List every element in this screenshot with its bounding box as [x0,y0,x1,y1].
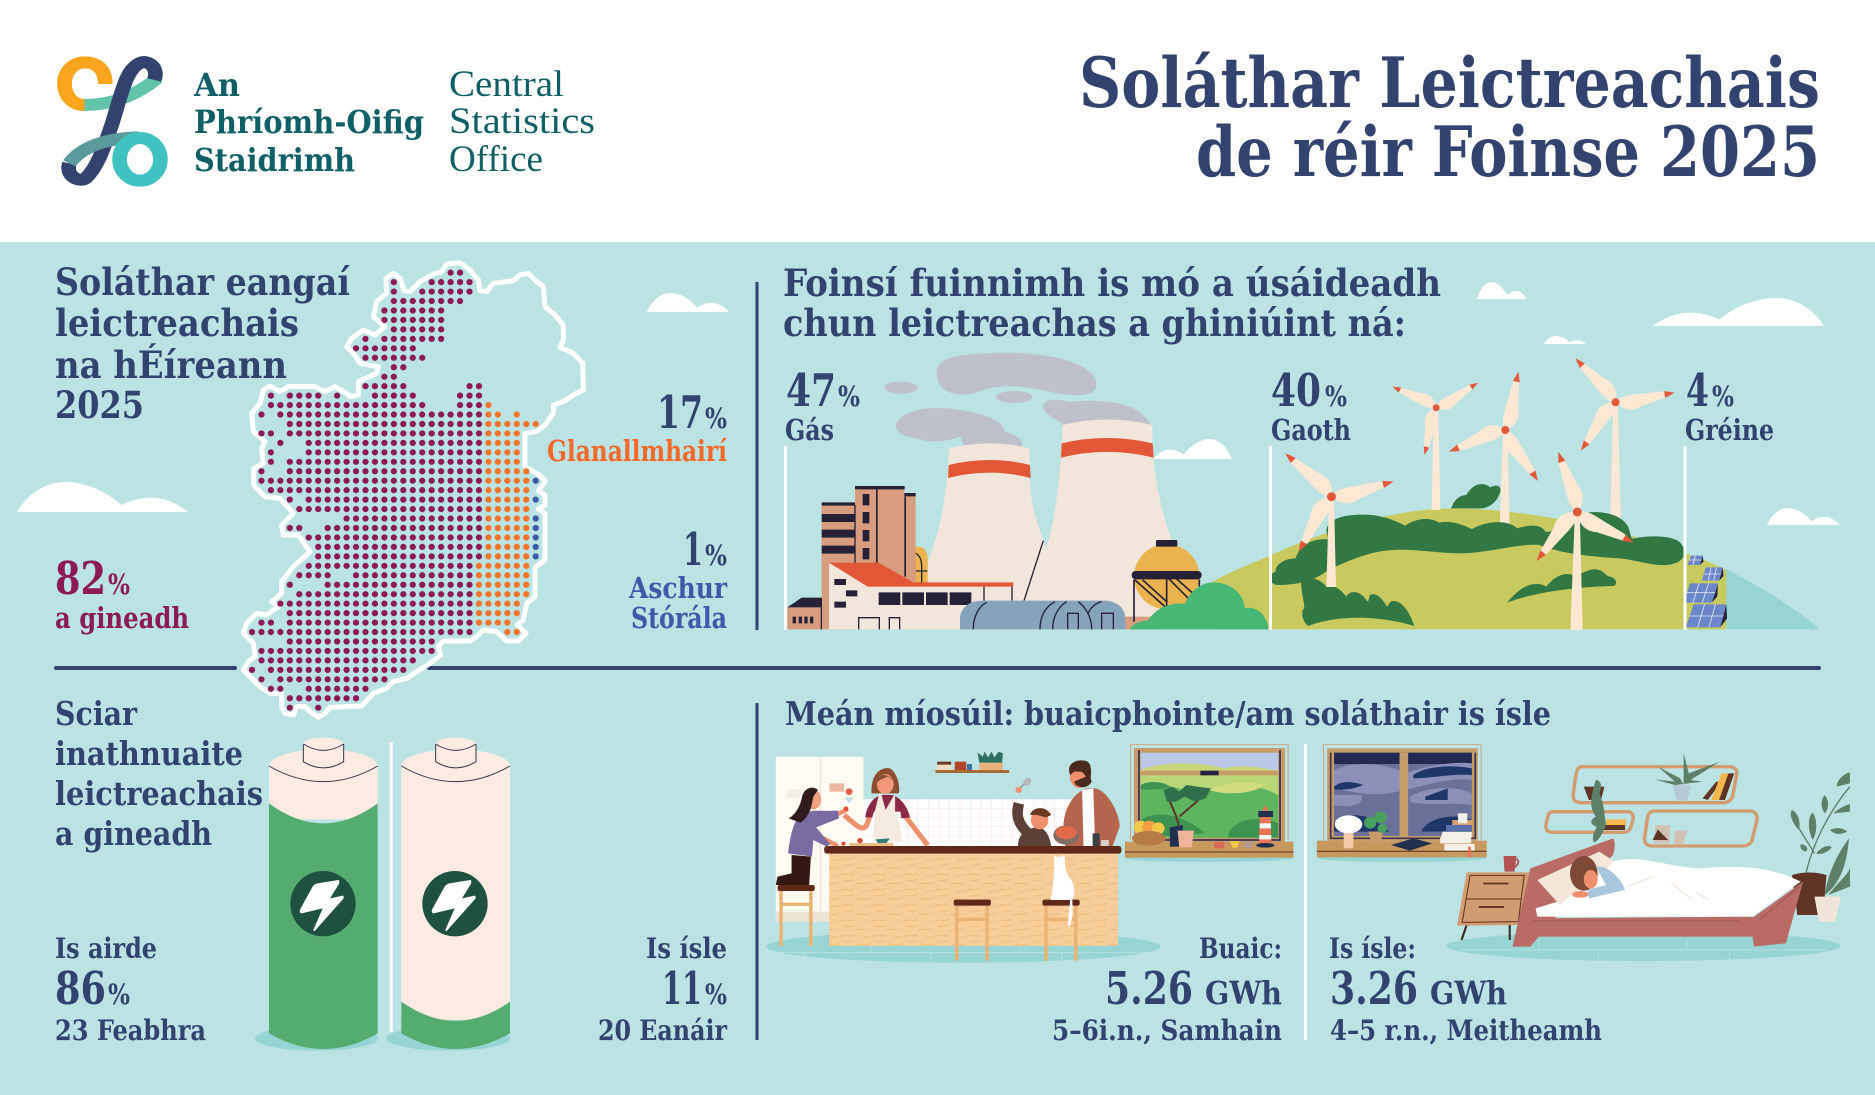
heading: renewable share [55,694,263,853]
night window [1323,744,1481,841]
sleeping person [1570,856,1625,898]
blue storage tank [960,601,1125,629]
section divider lines [54,282,1821,1040]
stat: 17% imports: Glanallmhairí [547,434,727,468]
wind turbines in front of hill [1282,446,1636,630]
stat: 1% storage: Stórála [631,601,727,635]
logo text: Irish name [193,66,424,179]
battery divider [390,742,393,1032]
gas holder [1123,540,1202,629]
stat: lowest 11%: % [705,978,727,1011]
stat: 1% storage: 1 [683,523,703,576]
stat: 17% imports [547,386,727,468]
title: Soláthar Leictreachais [1079,43,1820,124]
stat: 47% gas [785,364,860,447]
stat: peak 5.26 GWh: 5.26 [1105,962,1193,1015]
illustration: power station [787,353,1268,629]
heading: renewable share: leictreachais [55,774,263,813]
stat: lowest 11%: 11 [662,962,702,1015]
bar stools [778,885,1080,961]
battery: highest 86% [255,738,378,1051]
main panel background [0,242,1875,1095]
bed [1512,838,1803,947]
title [1079,43,1820,193]
stat: highest 86%: % [108,978,130,1011]
stat: 4% solar: % [1712,380,1734,413]
logo text: Irish name: Staidrimh [194,141,355,179]
clouds [17,282,1840,525]
stat: highest 86%: Is airde [55,932,157,965]
counter [824,838,1121,946]
stat: 40% wind: 40 [1271,364,1321,417]
logo text: English name [449,64,595,180]
source dividers [784,446,1686,630]
cooling towers [923,419,1178,629]
map of Ireland: dot matrix [243,263,583,717]
wind turbines behind hill [1391,352,1676,525]
stat: lowest 11%: Is ísle [646,932,727,965]
stat: peak 5.26 GWh: Buaic: [1199,932,1282,965]
stat: highest 86%: 23 Feabhra [55,1014,206,1047]
stat: 4% solar [1685,364,1774,447]
factory block [787,486,1013,629]
heading: energy sources: Foinsí fuinnimh is mó a úsáideadh [783,261,1441,305]
illustration: wind hill [1213,508,1820,629]
stat: 82% generated [55,552,189,635]
heading: renewable share: a gineadh [55,814,212,853]
stat: lowest 11% [598,932,728,1047]
man with bowl [1053,760,1120,846]
batteries [255,738,510,1051]
stat: 82% generated: % [108,568,130,601]
stat: highest 86%: 86 [55,962,106,1015]
stat: 40% wind: % [1325,380,1347,413]
logo text: English name: Statistics [449,101,595,142]
logo: CSO mark [64,62,160,181]
floor [1446,931,1840,961]
heading: monthly average peak/lowest: Meán míosúil: buaicphointe/am soláthair is ísle [785,694,1551,733]
fridge [776,757,864,922]
stat: 40% wind: Gaoth [1271,413,1351,447]
illustration: solar panels [1684,556,1727,627]
divider: peak/lowest [1304,744,1307,1040]
heading: energy sources [783,261,1441,345]
girl [776,788,848,885]
woman [844,768,928,845]
stat: 47% gas: Gás [785,413,834,447]
stat: 4% solar: Gréine [1685,413,1774,447]
heading: energy sources: chun leictreachas a ghiniúint ná: [783,301,1406,345]
stat: 82% generated: 82 [55,552,106,605]
stat: 4% solar: 4 [1686,364,1709,417]
sunny window [1131,745,1288,842]
battery: lowest 11% [387,738,510,1051]
stat: lowest 3.26 GWh [1329,932,1602,1047]
stat: lowest 3.26 GWh: Is ísle: [1329,932,1416,965]
white cat [1051,855,1074,928]
window sill with objects [1125,805,1293,862]
logo text: Irish name: An [193,66,240,104]
logo text: Irish name: Phríomh-Oifig [194,103,424,141]
stat: 82% generated: a gineadh [55,601,189,635]
houseplants [1791,773,1850,922]
stat: peak 5.26 GWh [1052,932,1282,1047]
title: de réir Foinse 2025 [1196,112,1820,193]
window sill with objects [1317,811,1487,862]
stat: 17% imports: % [705,402,727,435]
green bush [1130,582,1268,629]
boy with whisk [1015,776,1051,846]
stat: 1% storage: % [705,539,727,572]
stat: 17% imports: 17 [657,386,703,439]
nightstand and cup [1457,856,1529,940]
logo text: English name: Office [449,139,543,180]
stat: 1% storage [628,523,728,635]
stat: 40% wind [1271,364,1351,447]
wall shelves [1546,753,1757,846]
stat: lowest 11%: 20 Eanáir [598,1014,728,1047]
illustration: kitchen at peak [766,745,1293,963]
map dots: generation, imports, storage [252,273,537,708]
stat: 47% gas: % [838,380,860,413]
stat: highest 86% [55,932,206,1047]
logo text: English name: Central [449,64,564,105]
illustration: bedroom at lowest [1317,744,1850,961]
stat: lowest 3.26 GWh: 4–5 r.n., Meitheamh [1330,1014,1602,1047]
hill bushes [1269,484,1684,626]
heading: all-island supply: 2025 [55,383,144,427]
heading: all-island supply: leictreachais [55,301,299,345]
stat: lowest 3.26 GWh: 3.26 [1330,962,1418,1015]
smoke plumes [884,353,1151,447]
wall shelf [935,752,1009,773]
stat: peak 5.26 GWh: 5–6i.n., Samhain [1052,1014,1282,1047]
map outline [243,263,583,717]
tiled wall [864,799,1074,849]
stat: peak 5.26 GWh: GWh [1205,974,1282,1012]
heading: all-island supply: Soláthar eangaí [55,260,350,304]
heading: all-island supply [55,260,350,427]
floor [766,931,1161,963]
stat: 1% storage: Aschur [628,571,728,605]
heading: all-island supply: na hÉíreann [55,343,287,387]
stat: lowest 3.26 GWh: GWh [1430,974,1507,1012]
stat: 47% gas: 47 [786,364,836,417]
heading: renewable share: Sciar [55,694,137,733]
heading: renewable share: inathnuaite [55,734,243,773]
